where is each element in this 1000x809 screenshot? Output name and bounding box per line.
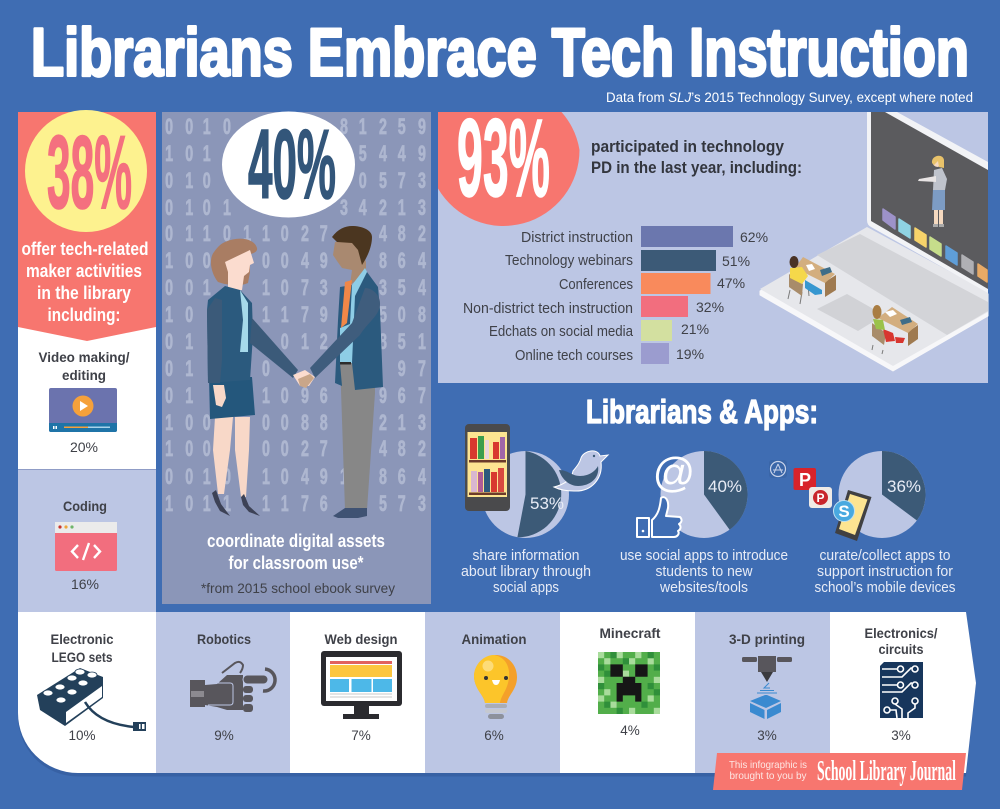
item: Minecraft: Minecraft <box>600 625 661 641</box>
item: 3-D printing <box>729 631 805 743</box>
icon: LEGO brick <box>37 668 146 731</box>
bars <box>641 226 733 364</box>
binary digit background: 0100573 <box>165 168 426 193</box>
binary digit background: 011011027482 <box>165 221 426 246</box>
bar values: 21% <box>681 321 709 337</box>
icon: robot hand <box>190 662 275 712</box>
PD heading: participated in technology <box>591 137 784 156</box>
item: 3-D printing: 3% <box>757 728 777 743</box>
binary digit background: 01097 <box>165 356 426 381</box>
caption: students to new <box>656 563 753 580</box>
icon: phone with bookshelf <box>465 424 510 511</box>
white ellipse with 40%: 40% <box>248 109 336 219</box>
handshake <box>293 370 315 388</box>
bar labels: Non-district tech instruction <box>463 300 633 317</box>
hair <box>332 226 372 265</box>
subtitle: data source: Data from SLJ’s 2015 Technology Survey, except where noted <box>606 90 973 105</box>
video making value: 20% <box>70 439 98 455</box>
student at desk 2 <box>872 305 918 354</box>
maker activities caption: maker activities <box>26 260 142 281</box>
credit text: brought to you by <box>730 770 807 782</box>
figure: woman <box>207 239 298 516</box>
panel: 40% coordinate digital assets <box>162 109 431 604</box>
face and neck <box>333 240 366 285</box>
coral circle with 93% <box>438 97 580 226</box>
maker activities caption: offer tech-related <box>22 238 148 259</box>
icon: code window <box>55 522 117 571</box>
PD heading <box>591 137 802 177</box>
video making label <box>38 349 130 383</box>
jacket <box>335 272 383 390</box>
bar values: 32% <box>696 299 724 315</box>
divider line <box>18 469 156 470</box>
icon: video player <box>49 388 117 432</box>
figure: man <box>310 226 383 518</box>
bar values: 19% <box>676 346 704 362</box>
item: electronics / circuits: circuits <box>878 641 924 657</box>
illustration: laptop classroom <box>760 112 988 371</box>
pie chart 40% <box>660 451 748 538</box>
binary digit background: 011096967 <box>165 383 426 408</box>
icon: skype: S <box>838 502 850 521</box>
app stat 1: share information 53% <box>461 424 608 596</box>
icon: creeper face <box>598 652 660 714</box>
caption: websites/tools <box>659 579 748 596</box>
trackpad <box>817 294 884 331</box>
panel: 93% technology PD <box>438 97 988 383</box>
binary digit background: 001081259 <box>165 114 426 139</box>
icon: pinterest square: P <box>799 470 811 490</box>
maker activities caption: in the library <box>37 282 132 303</box>
binary digit background: 1000049864 <box>165 248 426 273</box>
icon: at sign: @ <box>653 449 695 496</box>
app stat 2: social apps 40% <box>620 449 788 596</box>
item: robotics: Robotics <box>197 631 251 647</box>
laptop screen bezel <box>867 112 988 293</box>
bar labels <box>463 229 634 364</box>
pie chart 53%: 53% <box>530 494 564 513</box>
keyboard <box>817 234 988 335</box>
binary digit background: 010134213 <box>165 195 426 220</box>
icon: thumbs up <box>637 497 682 537</box>
video making label: Video making/ <box>38 349 130 365</box>
bar chart: PD types <box>463 226 768 364</box>
caption: about library through <box>461 563 591 580</box>
coding label: Coding <box>63 498 107 514</box>
jacket <box>207 286 253 383</box>
binary digit background <box>165 114 426 516</box>
item: electronics / circuits <box>864 625 938 743</box>
caption <box>620 547 788 596</box>
icon: 3-D printer <box>742 656 792 719</box>
panel: 38% maker activities: 38% <box>47 115 132 231</box>
item: web design: Web design <box>324 631 398 647</box>
caption: social apps <box>493 579 559 596</box>
pie chart 36% <box>838 451 926 538</box>
heading: Librarians & Apps: Librarians & Apps: <box>586 393 818 430</box>
icon: bird <box>554 451 608 491</box>
bar labels: Conferences <box>559 276 633 293</box>
icon: pinterest square <box>794 468 816 490</box>
item: electronic LEGO sets: LEGO sets <box>52 649 113 665</box>
bar values: 51% <box>722 253 750 269</box>
caption: coordinate digital assets <box>207 531 385 573</box>
footnote: ebook survey: *from 2015 school ebook survey <box>201 580 395 596</box>
item: Minecraft <box>598 625 661 738</box>
app stat 3: curate apps 36% <box>769 451 956 596</box>
item: web design: 7% <box>351 728 371 743</box>
item: electronics / circuits: 3% <box>891 728 911 743</box>
bar values: 47% <box>717 275 745 291</box>
caption <box>814 547 956 596</box>
item: electronic LEGO sets: 10% <box>68 728 96 743</box>
item: electronics / circuits: Electronics/ <box>864 625 938 641</box>
panel: maker activities band <box>18 612 976 776</box>
icon: app store <box>769 460 787 478</box>
item: robotics <box>190 631 275 743</box>
item: Minecraft: 4% <box>620 723 640 738</box>
bar values: 62% <box>740 229 768 245</box>
item: electronic LEGO sets: Electronic <box>50 631 114 647</box>
laptop base <box>760 228 988 371</box>
icon: tilted phone <box>835 490 872 541</box>
binary digit background: 10111176573 <box>165 491 426 516</box>
bar values <box>676 229 768 362</box>
caption <box>461 547 591 596</box>
video making label: editing <box>62 367 106 383</box>
binary digit background: 101179508 <box>165 302 426 327</box>
shirt <box>340 268 367 363</box>
banner: School Library Journal credit <box>713 753 966 790</box>
face and neck <box>225 250 254 290</box>
coral circle with 93%: 93% <box>457 97 550 220</box>
credit text: This infographic is <box>729 759 807 771</box>
white ellipse with 40% <box>222 109 355 219</box>
pie chart 36%: 36% <box>887 477 921 496</box>
PD heading: PD in the last year, including: <box>591 158 802 177</box>
binary digit background: 1015449 <box>165 141 426 166</box>
maker activities caption: including: <box>48 304 120 325</box>
pie chart 40%: 40% <box>708 477 742 496</box>
icon: skype <box>834 500 854 522</box>
student at desk 1 <box>788 256 836 304</box>
laptop screen <box>871 112 988 289</box>
binary digit background: 001010491864 <box>165 464 426 489</box>
screen colour keys <box>883 209 987 282</box>
item: animation: 6% <box>484 728 504 743</box>
tie <box>341 280 352 328</box>
caption: use social apps to introduce <box>620 547 788 564</box>
item: animation <box>462 631 526 743</box>
pie chart 53% <box>482 451 569 538</box>
caption: support instruction for <box>817 563 953 580</box>
caption: coordinate digital assets: coordinate digital assets <box>207 531 385 551</box>
maker activities caption <box>22 238 148 325</box>
binary digit background: 1000027482 <box>165 436 426 461</box>
yellow circle with 38% <box>25 110 147 232</box>
teacher on screen <box>918 156 947 227</box>
caption: share information <box>472 547 580 564</box>
icon: pinterest badge <box>809 487 832 508</box>
icon: circuit board <box>880 662 923 718</box>
coding value: 16% <box>71 576 99 592</box>
icon: light bulb <box>474 655 517 719</box>
bar labels: District instruction <box>521 229 633 246</box>
panel: 38% maker activities <box>18 110 156 612</box>
item: robotics: 9% <box>214 728 234 743</box>
caption: school’s mobile devices <box>814 579 956 596</box>
caption: coordinate digital assets: for classroom use* <box>228 553 364 573</box>
binary digit background: 1000088213 <box>165 410 426 435</box>
icon: monitor <box>321 651 402 719</box>
bar labels: Technology webinars <box>505 252 633 269</box>
binary digit background: 0011073354 <box>165 275 426 300</box>
item: electronic LEGO sets <box>37 631 146 743</box>
item: 3-D printing: 3-D printing <box>729 631 805 647</box>
credit text <box>729 759 807 782</box>
binary digit background: 01012851 <box>165 329 426 354</box>
icon: pinterest badge: P <box>816 491 825 505</box>
bar labels: Edchats on social media <box>489 323 634 340</box>
bar labels: Online tech courses <box>515 347 633 364</box>
item: animation: Animation <box>462 631 526 647</box>
hair <box>211 239 257 285</box>
caption: curate/collect apps to <box>820 547 950 564</box>
item: web design <box>321 631 402 743</box>
